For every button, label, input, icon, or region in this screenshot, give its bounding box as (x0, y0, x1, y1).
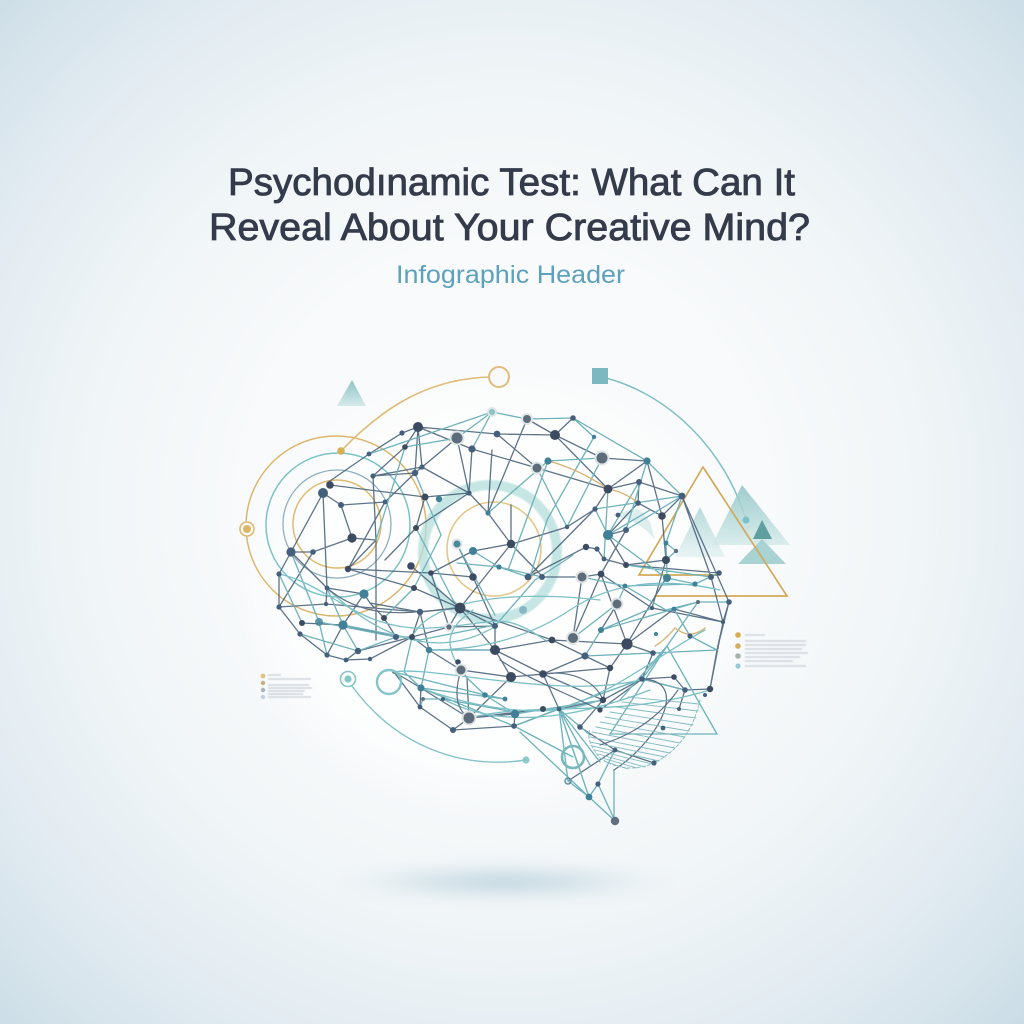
central teal ring (423, 485, 557, 619)
triangle cluster right (612, 467, 790, 596)
brain network (279, 412, 729, 821)
teal curves (279, 574, 720, 718)
title (209, 162, 810, 249)
subtitle: Infographic Header (396, 261, 625, 289)
gold target node left (240, 522, 254, 536)
title: Reveal About Your Creative Mind? (209, 207, 810, 249)
legend right (735, 632, 808, 669)
icon: teal triangle top left (337, 380, 366, 406)
hatched lower brain section (589, 690, 700, 769)
title: Psychodınamic Test: What Can It (228, 162, 795, 204)
concentric circles left (246, 436, 426, 616)
legend left (261, 674, 312, 699)
teal connector lower left (340, 672, 530, 764)
network nodes (276, 408, 732, 825)
slate curves (327, 588, 666, 770)
small ring node bottom (565, 778, 571, 784)
dark network edges (279, 418, 729, 781)
teal network edges (279, 412, 729, 821)
teal square connector (592, 368, 746, 520)
ring node lower brain (562, 746, 584, 768)
gold connector with ring top (337, 367, 509, 455)
gold accent curves (552, 462, 705, 646)
ring node lower centre (377, 670, 401, 694)
ground shadow (320, 863, 690, 901)
